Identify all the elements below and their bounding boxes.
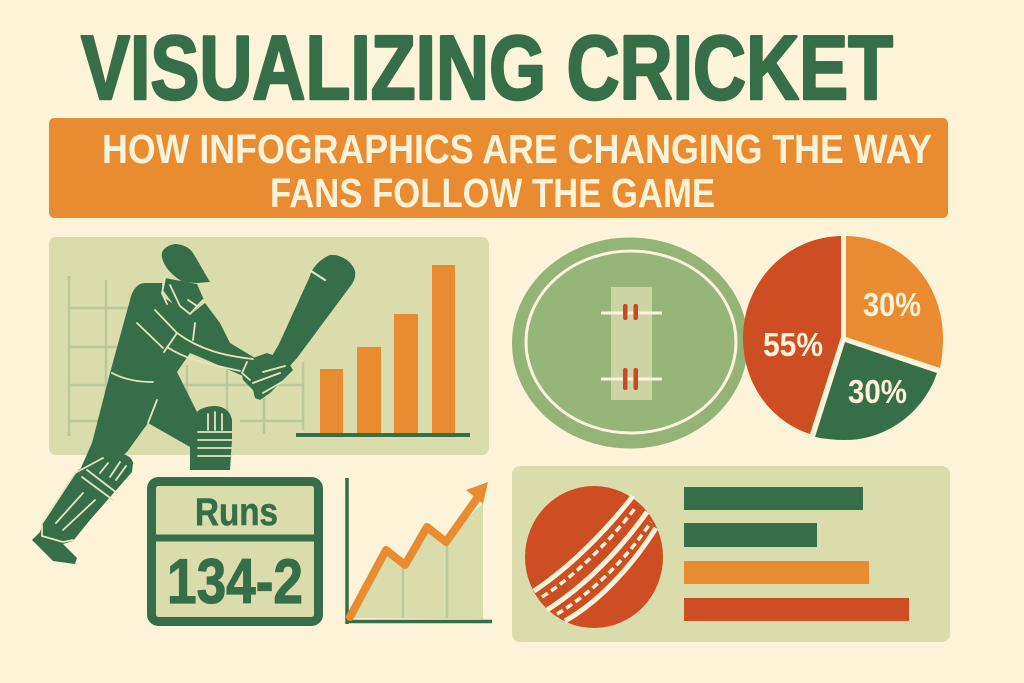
horizontal bar chart (684, 487, 909, 621)
icon: cricket batsman (32, 244, 355, 564)
pie slice: orange 30% (846, 236, 943, 368)
subtitle banner: FANS FOLLOW THE GAME (270, 170, 715, 216)
batsman leg pad and shoe (32, 453, 133, 564)
line chart with rising arrow (346, 478, 492, 624)
pie slice: green 30% (815, 342, 937, 440)
pie chart: 55% (763, 326, 823, 363)
bat (272, 255, 355, 368)
pie labels: 30% (863, 286, 921, 323)
batsman face guard (163, 278, 204, 316)
icon: cricket ball (525, 486, 663, 628)
net grid behind batsman (69, 276, 303, 436)
scoreboard (150, 482, 320, 622)
batsman helmet (162, 244, 210, 283)
panel: cricket ball and horizontal bars (512, 466, 950, 642)
batsman body and front leg (80, 283, 255, 470)
stumps (623, 304, 638, 390)
crease lines (601, 313, 662, 379)
pitch (611, 287, 652, 400)
cricket field diagram (512, 238, 748, 448)
batsman cream detail lines (42, 271, 325, 542)
pie chart: 30% (848, 373, 907, 410)
pie chart (743, 236, 943, 440)
bar chart: rising orange bars (296, 265, 470, 437)
scoreboard label: Runs (195, 491, 278, 534)
pie slice: red 55% (743, 236, 841, 434)
scoreboard score: 134-2 (167, 547, 303, 617)
subtitle banner (49, 118, 948, 218)
glove (240, 353, 293, 400)
panel: batting stats background (49, 237, 489, 455)
